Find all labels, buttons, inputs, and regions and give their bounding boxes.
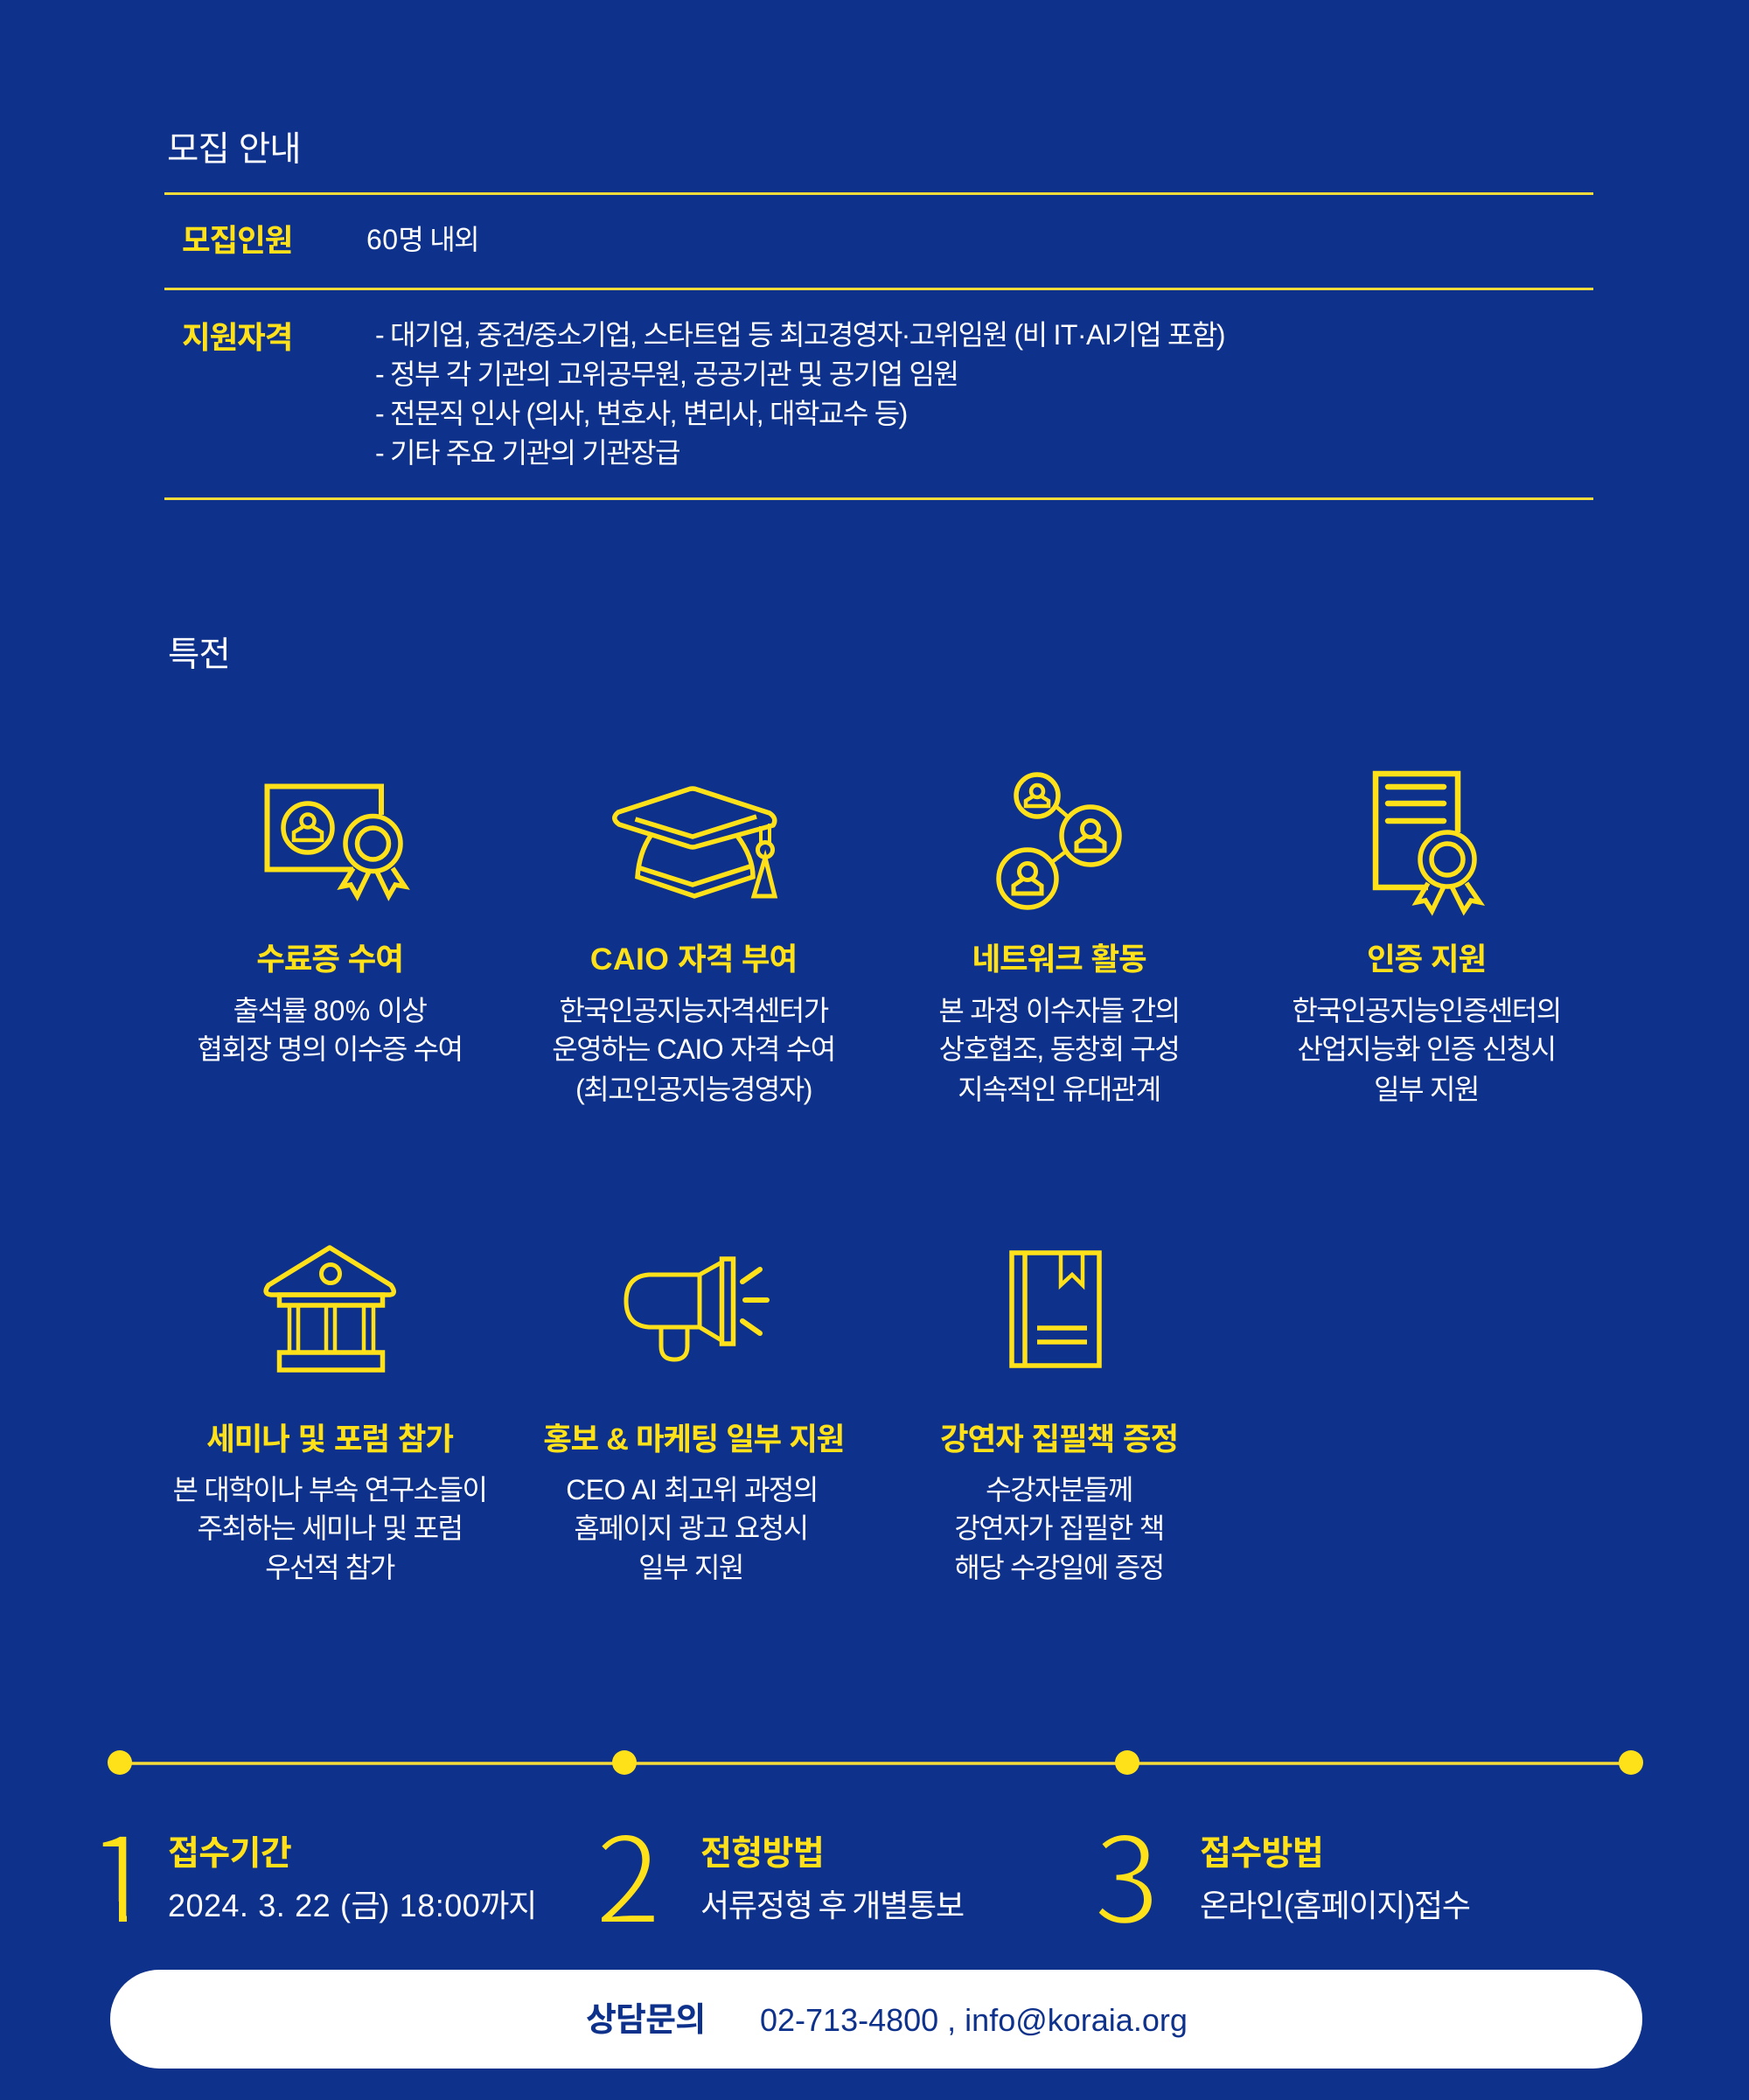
step 2 title: 전형방법 bbox=[700, 1835, 824, 1873]
icon: diploma with medal bbox=[268, 787, 405, 896]
benefit description bbox=[566, 1474, 818, 1583]
benefit description: 출석률 80% 이상 bbox=[233, 995, 426, 1026]
benefit description: 운영하는 CAIO 자격 수여 bbox=[552, 1033, 835, 1065]
benefit title: 네트워크 활동 bbox=[972, 942, 1146, 977]
benefit description bbox=[197, 995, 463, 1065]
benefit description: CEO AI 최고위 과정의 bbox=[566, 1474, 818, 1505]
icon: book bbox=[1012, 1253, 1099, 1366]
panel: benefit certificate bbox=[197, 942, 463, 1065]
contact label: 상담문의 bbox=[586, 2002, 705, 2039]
panel: benefit seminar bbox=[173, 1422, 486, 1583]
benefit description: (최고인공지능경영자) bbox=[575, 1074, 812, 1105]
row value: eligibility list: - 정부 각 기관의 고위공무원, 공공기관 및 공기업 임원 bbox=[375, 358, 958, 390]
step 3 number: 3 bbox=[1093, 1784, 1160, 1958]
benefit title: CAIO 자격 부여 bbox=[590, 942, 797, 977]
row value: eligibility list: - 기타 주요 기관의 기관장급 bbox=[375, 437, 679, 469]
benefit description: 우선적 참가 bbox=[265, 1552, 394, 1583]
benefit description: 강연자가 집필한 책 bbox=[954, 1512, 1164, 1544]
timeline bbox=[108, 1750, 1643, 1775]
step 1 text: 2024. 3. 22 (금) 18:00까지 bbox=[168, 1888, 536, 1923]
benefit description: 해당 수강일에 증정 bbox=[954, 1552, 1164, 1583]
benefit title: 강연자 집필책 증정 bbox=[940, 1422, 1178, 1457]
contact pill bbox=[110, 1970, 1642, 2069]
row value: eligibility list: - 대기업, 중견/중소기업, 스타트업 등 최고경영자·고위임원 (비 IT·AI기업 포함) bbox=[375, 319, 1224, 351]
panel: benefit book bbox=[940, 1422, 1178, 1583]
benefit description bbox=[173, 1474, 486, 1583]
panel: benefit CAIO bbox=[552, 942, 835, 1105]
benefit description: 본 대학이나 부속 연구소들이 bbox=[173, 1474, 486, 1505]
panel: recruitment info bbox=[164, 130, 1593, 500]
step 2 number: 2 bbox=[595, 1784, 662, 1958]
step 2 text: 서류정형 후 개별통보 bbox=[700, 1888, 964, 1923]
icon: document with medal bbox=[1376, 774, 1480, 911]
benefit description: 한국인공지능인증센터의 bbox=[1292, 995, 1561, 1026]
row label: eligibility: 지원자격 bbox=[182, 320, 292, 355]
benefit description: 산업지능화 인증 신청시 bbox=[1297, 1033, 1556, 1065]
benefit description: 일부 지원 bbox=[638, 1552, 743, 1583]
benefit description: 상호협조, 동창회 구성 bbox=[939, 1033, 1179, 1065]
panel: benefit certification bbox=[1292, 942, 1561, 1105]
row value: eligibility list: - 전문직 인사 (의사, 변호사, 변리사, 대학교수 등) bbox=[375, 398, 907, 429]
benefit description bbox=[552, 995, 835, 1105]
heading: benefits: 특전 bbox=[168, 636, 230, 674]
benefit title: 홍보 & 마케팅 일부 지원 bbox=[543, 1422, 844, 1457]
benefit description: 한국인공지능자격센터가 bbox=[559, 995, 828, 1026]
benefit description: 홈페이지 광고 요청시 bbox=[574, 1512, 808, 1544]
icon: institution building bbox=[266, 1248, 394, 1370]
benefit description: 주최하는 세미나 및 포럼 bbox=[197, 1512, 463, 1544]
benefit description: 협회장 명의 이수증 수여 bbox=[197, 1033, 463, 1065]
benefit description bbox=[938, 995, 1180, 1105]
panel: benefit network bbox=[938, 942, 1180, 1105]
benefit title: 세미나 및 포럼 참가 bbox=[206, 1422, 453, 1457]
benefit title: 인증 지원 bbox=[1367, 942, 1486, 977]
benefit description bbox=[954, 1474, 1164, 1583]
contact details: 02-713-4800 , info@koraia.org bbox=[760, 2002, 1188, 2038]
benefit description: 지속적인 유대관계 bbox=[958, 1074, 1160, 1105]
row value: eligibility list bbox=[375, 319, 1224, 469]
step 1 title: 접수기간 bbox=[168, 1835, 291, 1873]
row value: headcount: 60명 내외 bbox=[366, 224, 478, 255]
panel: benefit marketing bbox=[543, 1422, 844, 1583]
benefit description: 수강자분들께 bbox=[986, 1474, 1132, 1505]
icon: graduation cap bbox=[615, 789, 775, 896]
row label: headcount: 모집인원 bbox=[182, 223, 292, 258]
step 3 text: 온라인(홈페이지)접수 bbox=[1200, 1888, 1470, 1923]
benefit description bbox=[1292, 995, 1561, 1105]
step 3 title: 접수방법 bbox=[1200, 1835, 1323, 1873]
benefit description: 본 과정 이수자들 간의 bbox=[938, 995, 1180, 1026]
benefit description: 일부 지원 bbox=[1374, 1074, 1479, 1105]
heading: recruitment guide: 모집 안내 bbox=[167, 130, 301, 169]
icon: megaphone bbox=[626, 1259, 767, 1359]
benefit title: 수료증 수여 bbox=[256, 942, 403, 977]
step 1 number: 1 bbox=[87, 1784, 154, 1958]
icon: network of people bbox=[999, 775, 1119, 907]
